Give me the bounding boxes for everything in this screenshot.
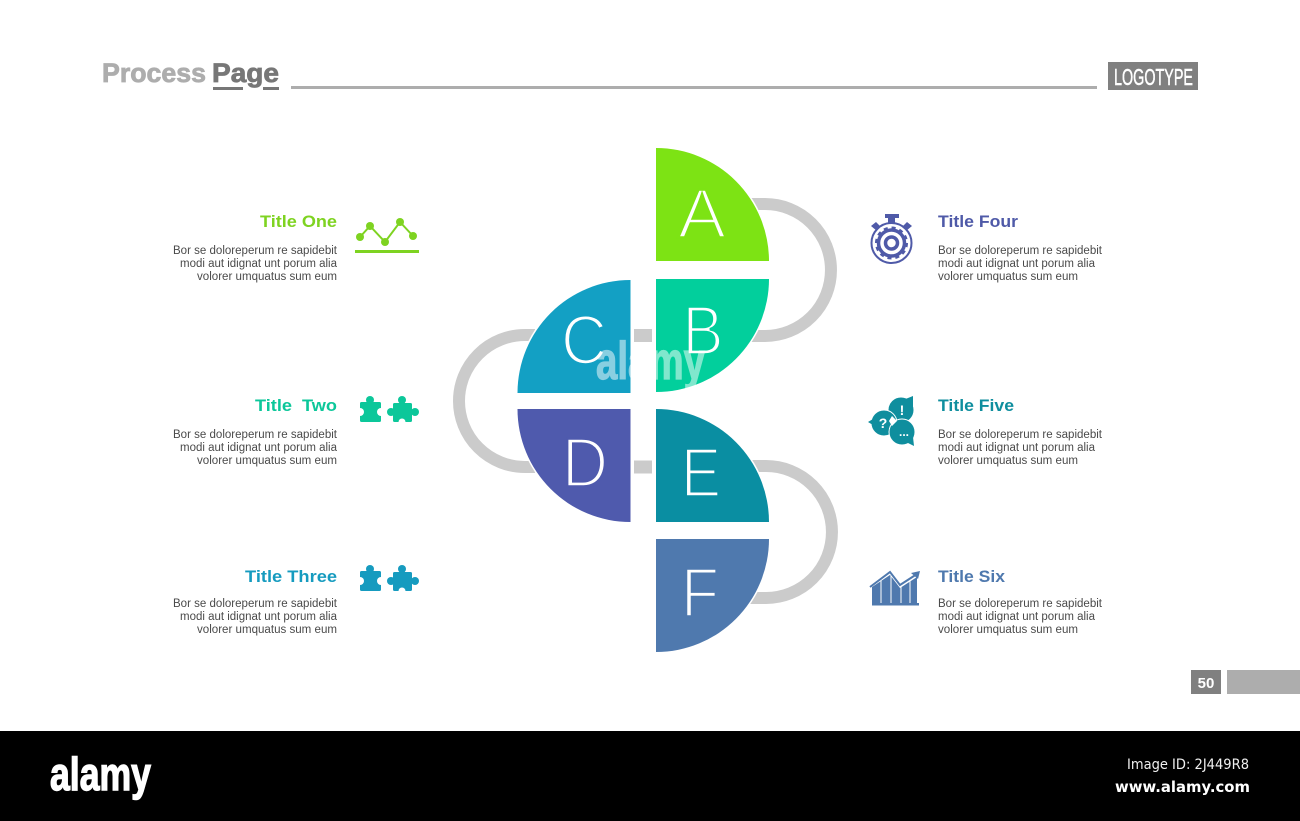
icon: speech bubbles: [868, 396, 915, 446]
title two text: Bor se doloreperum re sapidebit: [173, 429, 338, 441]
icon: speech bubbles: ?: [879, 415, 887, 431]
title one text: Title One: [260, 212, 337, 231]
title six text: [938, 567, 1103, 636]
title four text: Bor se doloreperum re sapidebit: [938, 245, 1103, 257]
item: Title One: [173, 212, 419, 283]
footer logo: alamy: [50, 748, 151, 800]
segment D: [518, 409, 630, 522]
title one text: [173, 212, 338, 283]
segment A: A: [678, 174, 726, 252]
item: Title Two: [173, 396, 419, 467]
segment D: D: [562, 424, 608, 502]
diagram: connectors and quarter circles: [459, 148, 832, 652]
image id: Image ID: 2J449R8: [1127, 757, 1249, 773]
heading: Process Page: Page: [212, 58, 279, 88]
title three text: [173, 567, 338, 636]
segment B: [656, 279, 769, 392]
header: [102, 58, 1198, 90]
segment C: [518, 280, 630, 393]
title six text: volorer umquatus sum eum: [938, 624, 1078, 636]
item: Title Four: [871, 212, 1103, 283]
item: Title Six: [870, 567, 1103, 636]
item: Title Three: [173, 565, 419, 636]
footer bar: [0, 731, 1300, 821]
website: www.alamy.com: [1115, 778, 1250, 796]
title two text: volorer umquatus sum eum: [197, 455, 337, 467]
segment C: C: [561, 301, 607, 379]
segment F: [656, 539, 769, 652]
title three text: Title Three: [245, 567, 337, 586]
page number: [1191, 670, 1300, 694]
title three text: modi aut idignat unt porum alia: [180, 611, 338, 623]
title five text: [938, 396, 1103, 467]
title five text: Bor se doloreperum re sapidebit: [938, 429, 1103, 441]
title two text: modi aut idignat unt porum alia: [180, 442, 338, 454]
icon: puzzle pieces: [356, 565, 419, 594]
segment B: B: [682, 292, 724, 370]
title six text: modi aut idignat unt porum alia: [938, 611, 1096, 623]
segment E: E: [681, 434, 721, 512]
grey connectors: [459, 204, 832, 598]
title one text: volorer umquatus sum eum: [197, 271, 337, 283]
title three text: volorer umquatus sum eum: [197, 624, 337, 636]
title four text: Title Four: [938, 212, 1018, 231]
segment F: F: [681, 554, 719, 632]
title two text: [173, 396, 338, 467]
logotype badge: [1108, 62, 1198, 90]
watermark: alamy: [596, 332, 705, 391]
heading: Process Page: [102, 58, 279, 90]
title six text: Title Six: [938, 567, 1006, 586]
logotype badge: LOGOTYPE: [1114, 64, 1193, 90]
page number: 50: [1198, 675, 1214, 692]
title two text: Title Two: [255, 396, 337, 415]
title four text: modi aut idignat unt porum alia: [938, 258, 1096, 270]
title four text: volorer umquatus sum eum: [938, 271, 1078, 283]
title one text: modi aut idignat unt porum alia: [180, 258, 338, 270]
item: Title Five: [868, 396, 1103, 467]
title five text: Title Five: [938, 396, 1014, 415]
segment E: [656, 409, 769, 522]
icon: puzzle pieces: [356, 396, 419, 426]
segment A: [656, 148, 769, 261]
title five text: modi aut idignat unt porum alia: [938, 442, 1096, 454]
icon: bar chart with arrow: [870, 571, 920, 606]
icon: stopwatch with gear: [871, 214, 912, 263]
heading: Process Page: Process: [102, 58, 206, 88]
title three text: Bor se doloreperum re sapidebit: [173, 598, 338, 610]
title five text: volorer umquatus sum eum: [938, 455, 1078, 467]
icon: speech bubbles: !: [900, 402, 904, 418]
title six text: Bor se doloreperum re sapidebit: [938, 598, 1103, 610]
title four text: [938, 212, 1103, 283]
icon: speech bubbles: ...: [899, 425, 909, 439]
icon: line chart: [355, 218, 419, 253]
title one text: Bor se doloreperum re sapidebit: [173, 245, 338, 257]
